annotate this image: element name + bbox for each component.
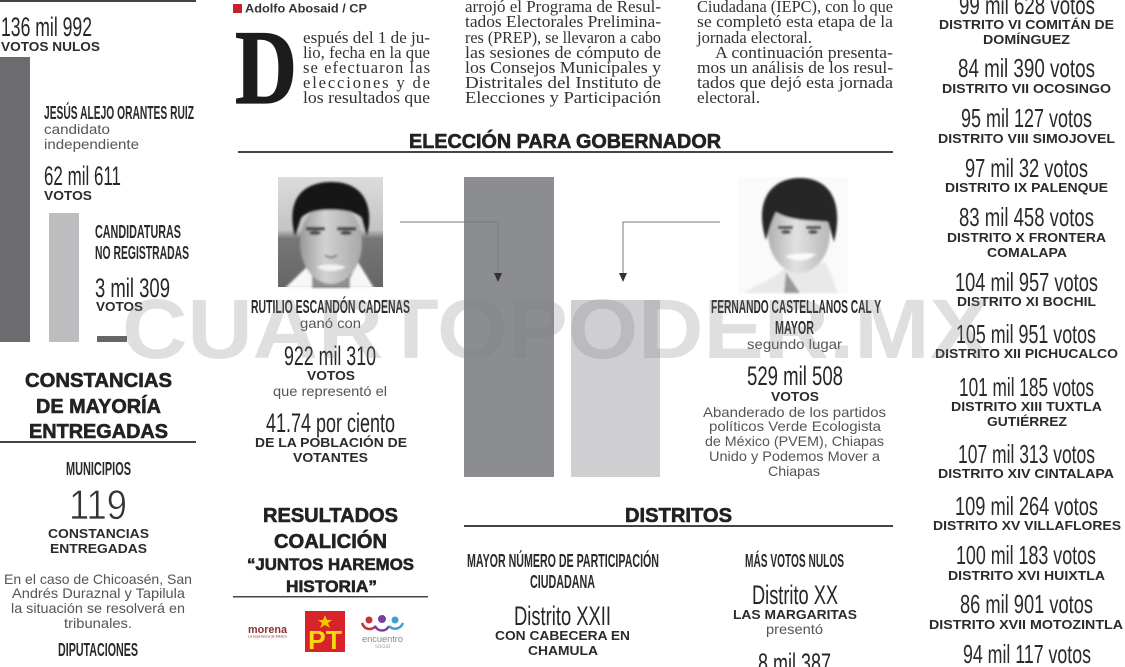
panel: más votos nulos	[733, 550, 857, 667]
panel: votes per district: DISTRITO XI BOCHIL	[957, 294, 1096, 309]
subheading: diputaciones: DIPUTACIONES	[58, 640, 138, 660]
total: null votes	[1, 12, 100, 54]
panel: winner stats: 922 mil 310	[284, 341, 376, 371]
total: null votes: VOTOS NULOS	[1, 39, 100, 54]
panel: runner-up stats: Abanderado de los partidos	[703, 404, 886, 420]
heading: constancias de mayoría: CONSTANCIAS	[25, 370, 172, 392]
logo: encuentro social: social	[375, 644, 390, 650]
panel: winner stats: 41.74 por ciento	[266, 408, 395, 438]
candidate: non-registered: VOTOS	[96, 299, 143, 314]
municipios count	[48, 459, 149, 556]
panel: mayor participación: Distrito XXII	[514, 601, 611, 631]
panel: votes per district: DISTRITO XIII TUXTLA	[951, 399, 1103, 414]
bar chart: governor results	[464, 177, 660, 477]
article column 1	[303, 28, 430, 107]
article column 1: lio, fecha en la que	[303, 43, 430, 62]
panel: votes per district: DISTRITO XV VILLAFLORES	[933, 518, 1121, 533]
candidate: Jesús Alejo Orantes Ruiz	[44, 102, 194, 203]
text: tribunales note: tribunales.	[64, 615, 132, 631]
candidate: Jesús Alejo Orantes Ruiz: independiente	[44, 136, 139, 152]
panel: runner-up stats: Unido y Podemos Mover a	[709, 448, 880, 464]
panel: votes per district: DISTRITO XIV CINTALAPA	[938, 466, 1115, 481]
heading: distritos: DISTRITOS	[625, 505, 732, 527]
article column 2: Elecciones y Participación	[465, 88, 661, 107]
heading: resultados coalición: HISTORIA”	[286, 577, 377, 596]
heading: resultados coalición: RESULTADOS	[263, 505, 398, 527]
heading: constancias de mayoría: DE MAYORÍA	[36, 395, 161, 418]
panel: votes per district: DISTRITO VIII SIMOJOVEL	[938, 131, 1115, 146]
panel: runner-up stats: VOTOS	[771, 389, 819, 404]
panel: runner-up stats: políticos Verde Ecologista	[709, 418, 881, 434]
bar: null votes	[0, 57, 30, 342]
heading: resultados coalición	[233, 505, 428, 598]
candidate: non-registered: CANDIDATURAS	[95, 222, 181, 242]
panel: winner stats: RUTILIO ESCANDÓN CADENAS	[251, 296, 410, 317]
article column 3	[696, 0, 894, 107]
drop cap: D	[235, 9, 297, 126]
panel: más votos nulos: MÁS VOTOS NULOS	[745, 550, 844, 571]
candidate: Jesús Alejo Orantes Ruiz: 62 mil 611	[44, 161, 121, 191]
logo: PT	[305, 611, 345, 655]
municipios count: CONSTANCIAS	[48, 526, 149, 541]
panel: other votes	[0, 0, 196, 342]
panel: winner stats	[251, 296, 410, 465]
panel: runner-up stats: MAYOR	[775, 318, 814, 338]
panel: votes per district: DOMÍNGUEZ	[983, 32, 1070, 47]
article column 2: Distritales del Instituto de	[465, 73, 661, 92]
candidate: Jesús Alejo Orantes Ruiz: JESÚS ALEJO ORANTES RUIZ	[44, 102, 194, 123]
heading: constancias de mayoría	[0, 370, 196, 443]
panel: winner stats: ganó con	[300, 315, 361, 331]
panel: votes per district: COMALAPA	[987, 245, 1068, 260]
article column 2: res (PREP), se llevaron a cabo	[465, 28, 661, 47]
text: tribunales note: Andrés Duraznal y Tapilula	[12, 585, 185, 601]
candidate: non-registered	[95, 222, 189, 314]
byline: Adolfo Abosaid / CP	[245, 2, 367, 16]
municipios count: MUNICIPIOS	[66, 459, 131, 479]
logo: PT: PT	[308, 625, 342, 655]
text: tribunales note	[4, 571, 192, 631]
heading: elección para gobernador: ELECCIÓN PARA GOBERNADOR	[409, 129, 722, 153]
logo: encuentro social	[362, 615, 403, 650]
panel: mayor participación: CHAMULA	[528, 643, 599, 658]
panel: runner-up stats: Chiapas	[768, 463, 820, 479]
article column 1: espués del 1 de ju-	[303, 28, 430, 47]
logo: encuentro social: encuentro	[362, 634, 403, 644]
panel: winner stats: DE LA POBLACIÓN DE	[255, 435, 407, 450]
article column 3: jornada electoral.	[696, 28, 812, 47]
article column 2: las sesiones de cómputo de	[465, 43, 661, 62]
photo: Fernando Castellanos	[738, 177, 848, 293]
heading: resultados coalición: COALICIÓN	[274, 529, 387, 553]
panel: votes per district: DISTRITO XII PICHUCALCO	[935, 346, 1118, 361]
article column 3: electoral.	[697, 88, 760, 107]
candidate: Jesús Alejo Orantes Ruiz: VOTOS	[44, 188, 92, 203]
panel: constancias	[0, 370, 196, 660]
article column 2	[465, 0, 662, 107]
panel: votes per district: DISTRITO X FRONTERA	[947, 230, 1107, 245]
heading: constancias de mayoría: ENTREGADAS	[29, 421, 168, 443]
total: null votes: 136 mil 992	[1, 12, 92, 42]
article column 3: tados que dejó esta jornada	[697, 73, 894, 92]
panel: votes per district: DISTRITO XVI HUIXTLA	[948, 568, 1106, 583]
article column 2: tados Electorales Prelimina-	[465, 12, 661, 31]
article column 1: elecciones y de	[303, 73, 430, 92]
text: tribunales note: la situación se resolverá en	[11, 600, 185, 616]
panel: votes per district: GUTIÉRREZ	[987, 414, 1067, 429]
photo: Rutilio Escandón	[278, 177, 383, 288]
panel: más votos nulos: LAS MARGARITAS	[733, 607, 857, 622]
article column 3: mos un análisis de los resul-	[697, 58, 893, 77]
article column 2: los Consejos Municipales y	[465, 58, 662, 77]
article text	[235, 0, 894, 126]
panel: runner-up stats: de México (PVEM), Chiapas	[705, 433, 884, 449]
panel: runner-up stats: FERNANDO CASTELLANOS CAL Y	[711, 297, 881, 317]
panel: runner-up stats	[703, 297, 886, 479]
panel: mayor participación: CIUDADANA	[530, 572, 595, 592]
panel: votes per district: DISTRITO VII OCOSINGO	[942, 81, 1111, 96]
panel: winner stats: VOTOS	[307, 368, 355, 383]
municipios count: ENTREGADAS	[50, 541, 147, 556]
watermark: CUARTOPODER.MX	[122, 282, 990, 376]
panel: winner stats: que representó el	[273, 383, 387, 399]
candidate: non-registered: NO REGISTRADAS	[95, 243, 189, 263]
arrow: runner-up to bar	[619, 222, 720, 282]
panel: mayor participación: CON CABECERA EN	[495, 628, 630, 643]
text: tribunales note: En el caso de Chicoasén, San	[4, 571, 192, 587]
logo: morena: morena	[248, 624, 288, 636]
arrow: winner to bar	[400, 222, 502, 282]
panel: runner-up stats: segundo lugar	[747, 336, 842, 352]
heading: resultados coalición: “JUNTOS HAREMOS	[247, 555, 414, 574]
panel: votes per district: DISTRITO VI COMITÁN DE	[939, 17, 1114, 32]
panel: votes per district: DISTRITO XVII MOTOZINTLA	[929, 617, 1124, 632]
panel: votes per district: DISTRITO IX PALENQUE	[945, 180, 1108, 195]
bar: non-registered	[97, 336, 127, 342]
candidate: Jesús Alejo Orantes Ruiz: candidato	[44, 121, 110, 137]
panel: mayor participación: MAYOR NÚMERO DE PARTICIPACIÓN	[467, 550, 659, 571]
panel: mayor participación	[467, 550, 659, 658]
panel: más votos nulos: Distrito XX	[752, 580, 838, 610]
candidate: non-registered: 3 mil 309	[95, 273, 170, 303]
panel: winner stats: VOTANTES	[293, 450, 368, 465]
logo: morena: La esperanza de México	[248, 634, 287, 638]
bar: independent candidate	[49, 213, 79, 342]
article column 1: se efectuaron las	[303, 58, 430, 77]
panel: votes per district	[929, 0, 1124, 667]
panel: runner-up stats: 529 mil 508	[747, 361, 843, 391]
article column 3: A continuación presenta-	[715, 43, 893, 62]
municipios count: 119	[69, 481, 127, 528]
panel: más votos nulos: presentó	[766, 621, 823, 637]
article column 1: los resultados que	[303, 88, 430, 107]
article column 3: se completó esta etapa de la	[697, 12, 894, 31]
